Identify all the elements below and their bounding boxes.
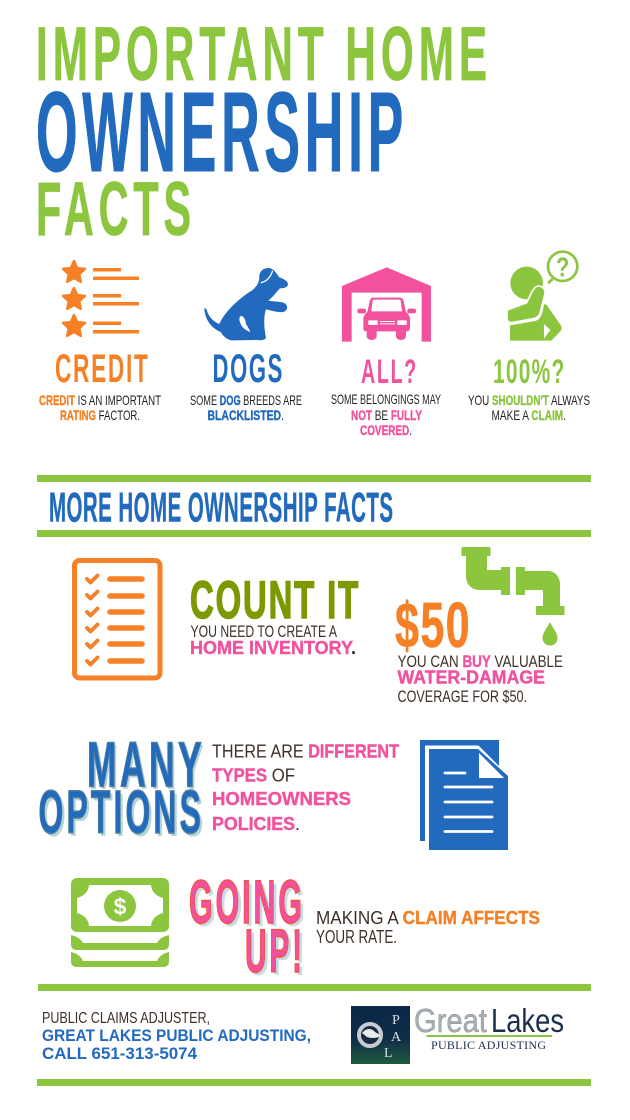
heading: count it: COUNT IT	[190, 571, 360, 630]
text: policies fact: POLICIES.	[212, 814, 300, 834]
text: contact: PUBLIC CLAIMS ADJUSTER,	[42, 1010, 210, 1027]
text: inventory fact: YOU NEED TO CREATE A	[190, 622, 337, 641]
text: all fact	[331, 391, 441, 438]
icon: person thinking	[507, 252, 577, 341]
text: inventory fact: HOME INVENTORY.	[190, 638, 356, 658]
text: coverage fact	[398, 652, 563, 706]
icon: rating stars	[63, 261, 139, 336]
heading: going up: UP!	[245, 917, 305, 985]
text: all fact: SOME BELONGINGS MAY	[331, 391, 441, 407]
heading: all: ALL?	[361, 353, 418, 391]
logo: great lakes public adjusting: Lakes	[491, 1002, 564, 1039]
text: rate fact: MAKING A CLAIM AFFECTS	[316, 908, 540, 928]
heading: going up	[189, 868, 308, 988]
text: coverage fact: WATER-DAMAGE	[398, 668, 545, 688]
icon: money stack: $	[114, 894, 127, 920]
panel: going up: UP!	[248, 920, 308, 988]
heading: 100 percent: 100%?	[493, 353, 566, 391]
text: credit fact	[39, 392, 161, 423]
heading: going up: GOING	[189, 868, 305, 936]
panel: count it	[74, 560, 360, 678]
text: rate fact: YOUR RATE.	[316, 927, 397, 947]
panel: water damage	[395, 547, 564, 706]
heading: 50 dollars: $50	[395, 589, 471, 661]
text: credit fact: CREDIT IS AN IMPORTANT	[39, 392, 161, 408]
text: rate fact	[316, 908, 540, 947]
text: contact: GREAT LAKES PUBLIC ADJUSTING,	[42, 1026, 311, 1045]
icon: checklist	[74, 560, 160, 678]
text: contact	[42, 1010, 311, 1063]
heading: credit: CREDIT	[55, 347, 150, 391]
logo: great lakes public adjusting: PUBLIC ADJUSTING	[431, 1038, 546, 1052]
logo: great lakes public adjusting: P	[392, 1013, 400, 1028]
heading: many options: MANY	[89, 731, 207, 803]
text: dogs fact	[190, 392, 302, 423]
text: coverage fact: COVERAGE FOR $50.	[398, 687, 527, 706]
panel: dogs	[190, 268, 302, 423]
text: coverage fact: YOU CAN BUY VALUABLE	[398, 652, 563, 671]
title	[36, 12, 492, 252]
text: claim fact: MAKE A CLAIM.	[492, 407, 566, 423]
text: policies fact: TYPES OF	[212, 766, 295, 786]
icon: dog	[204, 268, 288, 340]
heading: many options: OPTIONS	[38, 778, 204, 846]
heading: dogs: DOGS	[212, 347, 284, 391]
icon: money stack	[71, 878, 169, 967]
text: contact: CALL 651-313-5074	[42, 1044, 198, 1063]
text: dogs fact: SOME DOG BREEDS ARE	[190, 392, 302, 408]
text: policies fact: THERE ARE DIFFERENT	[212, 742, 399, 762]
title: FACTS	[36, 167, 196, 252]
panel: credit	[39, 261, 161, 423]
logo: great lakes public adjusting: L	[384, 1046, 393, 1061]
text: credit fact: RATING FACTOR.	[60, 407, 140, 423]
text: all fact: NOT BE FULLY	[351, 407, 422, 423]
panel: many options	[38, 728, 508, 850]
panel: going up	[71, 868, 540, 988]
text: claim fact: YOU SHOULDN'T ALWAYS	[468, 392, 590, 408]
text: policies fact: HOMEOWNERS	[212, 789, 351, 809]
logo: great lakes public adjusting: Great	[414, 1002, 487, 1039]
panel: going up: GOING	[192, 871, 308, 939]
panel: footer contact	[42, 1002, 564, 1064]
heading: many options	[38, 728, 207, 849]
text: inventory fact	[190, 622, 356, 658]
icon: documents	[420, 740, 508, 850]
text: claim fact	[468, 392, 590, 423]
heading: many options: MANY	[87, 728, 205, 800]
icon: car in garage	[342, 267, 431, 342]
icon: person thinking: ?	[556, 252, 569, 283]
panel: all	[331, 267, 441, 438]
text: all fact: COVERED.	[360, 422, 412, 438]
icon: leaking pipe	[462, 547, 564, 646]
text: policies fact	[212, 742, 399, 834]
panel: 100 percent	[468, 252, 590, 423]
heading: many options: OPTIONS	[41, 781, 206, 849]
text: dogs fact: BLACKLISTED.	[208, 407, 284, 423]
logo: great lakes public adjusting	[351, 1002, 564, 1064]
logo: great lakes public adjusting: A	[391, 1030, 402, 1045]
